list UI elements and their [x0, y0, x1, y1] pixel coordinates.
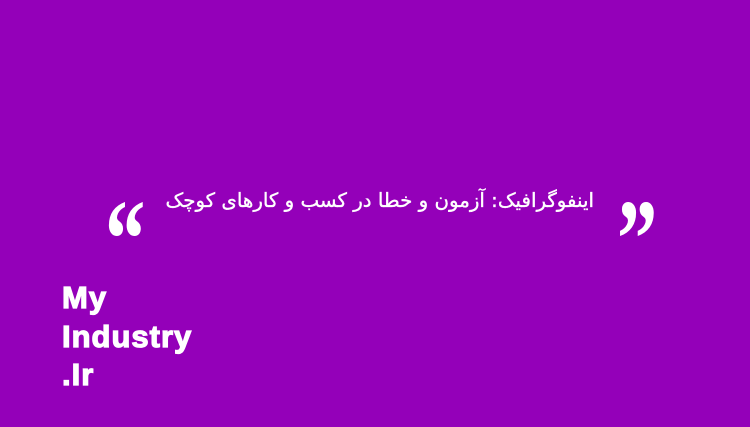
logo: My Industry .Ir: .Ir	[62, 357, 94, 392]
logo: My Industry .Ir: Industry	[62, 318, 192, 354]
icon: closing quotation mark: ”	[617, 178, 657, 302]
logo: My Industry .Ir: My	[62, 280, 107, 315]
heading: persian title: اینفوگرافیک: آزمون و خطا در کسب و کارهای کوچک	[166, 189, 594, 212]
logo: My Industry .Ir	[62, 280, 192, 392]
icon: opening quotation mark: “	[105, 178, 145, 302]
